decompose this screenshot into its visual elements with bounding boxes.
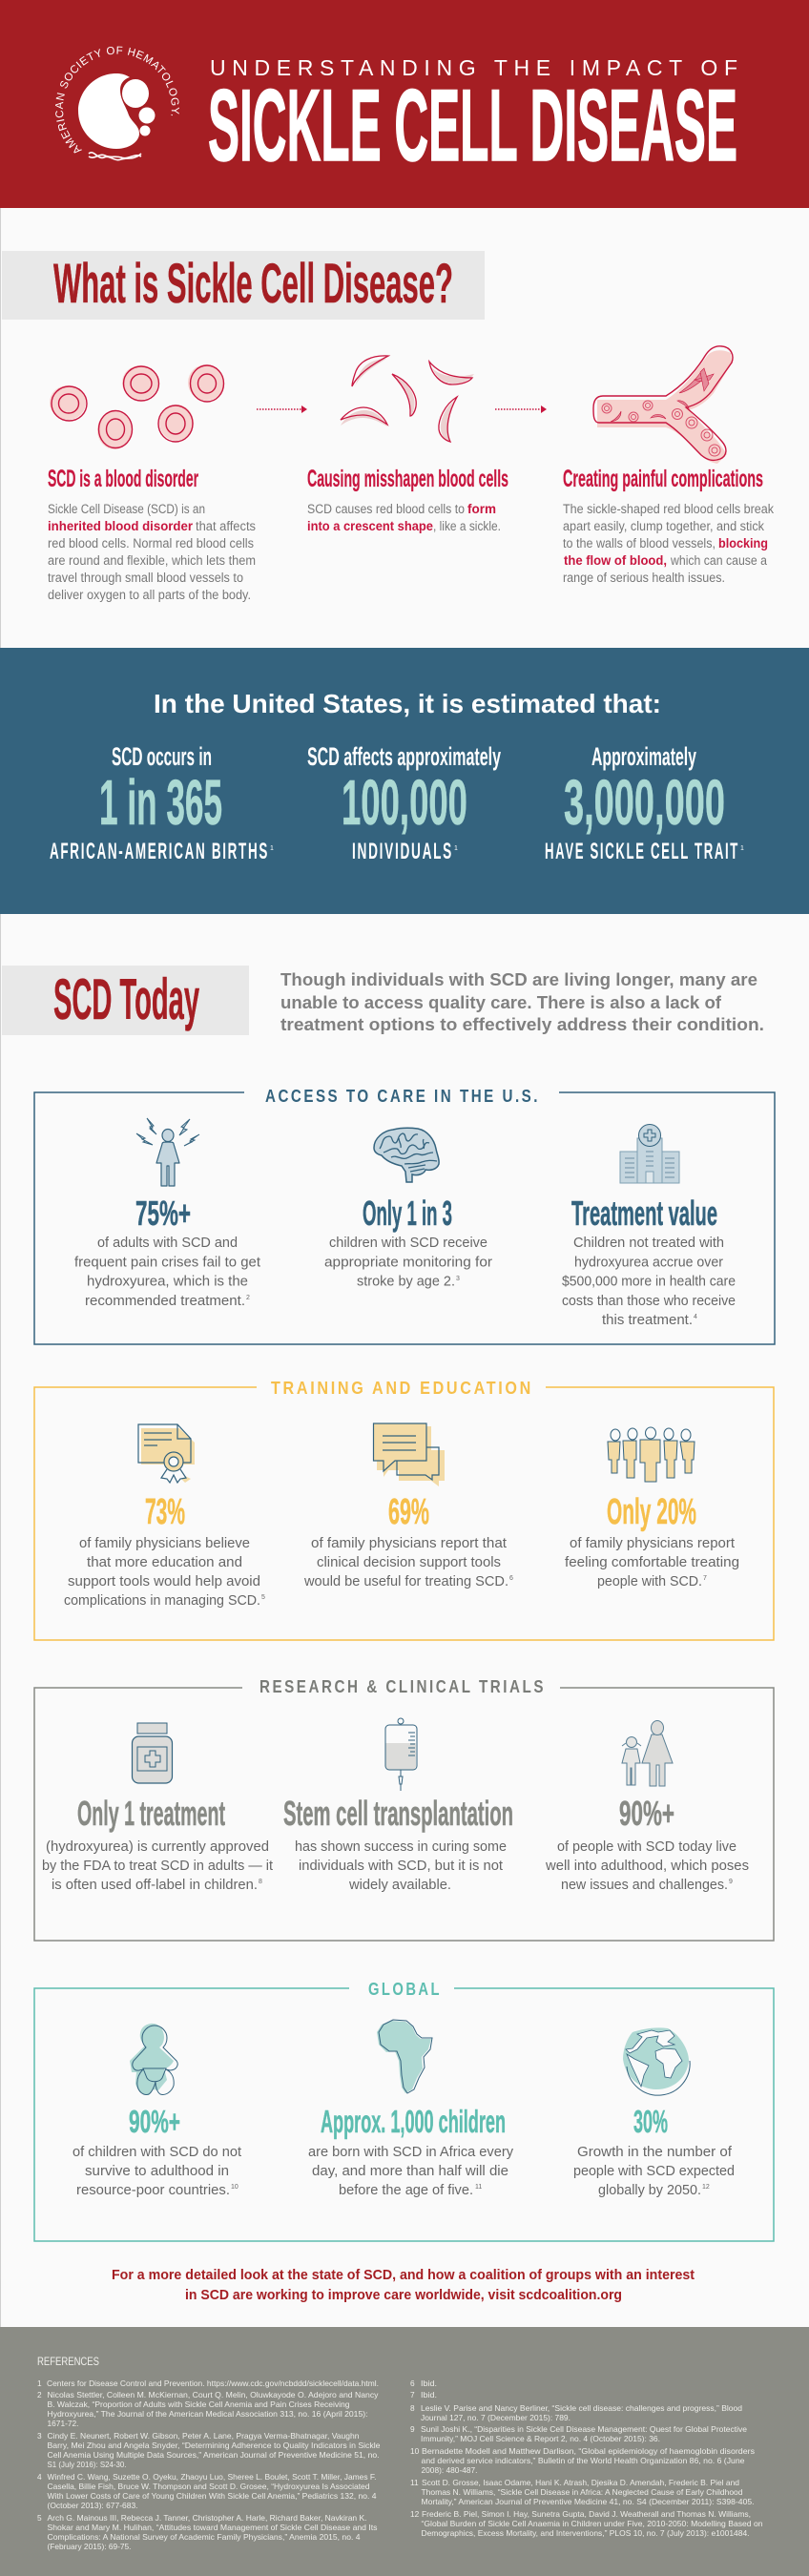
stat: 100,000: SCD affects approximately [307,742,501,771]
stat: only 1 in 3: children with SCD receive [329,1236,487,1251]
column: SCD is a blood disorder: travel through small blood vessels to [48,571,243,585]
column: creating painful complications: range of serious health issues. [563,571,725,585]
column: creating painful complications: to the walls of blood vessels, [563,536,716,551]
column: creating painful complications: blocking [718,536,768,551]
column: SCD is a blood disorder: deliver oxygen to all parts of the body. [48,588,251,602]
column: SCD is a blood disorder: are round and flexible, which lets them [48,553,256,568]
references list: right column: 12 [410,2509,420,2519]
references list: right column: Leslie V. Parise and Nancy Berliner, “Sickle cell disease: challenges and progress,” Blood [421,2403,742,2413]
header banner [0,0,809,208]
references list: right column [410,2379,763,2538]
stat: stem cell transplantation: widely available. [348,1878,451,1893]
arrow: cells to sickle cells [257,405,307,413]
icon: Africa map [377,2020,432,2093]
stat: 90%+ adulthood [545,1794,749,1893]
stat: approx 1,000 children: 11 [475,2184,482,2191]
stat: only 20%: people with SCD. [597,1574,702,1589]
stat: only 1 treatment: Only 1 treatment [77,1794,225,1833]
icon: round red blood cells [50,364,224,449]
column: SCD is a blood disorder: inherited blood disorder [48,519,194,533]
references list: left column [37,2379,381,2551]
icon: group of people [608,1427,695,1482]
stat: 3,000,000 [545,742,744,864]
stat: 69%: would be useful for treating SCD. [303,1574,508,1589]
references list: left column: Centers for Disease Control and Prevention. https://www.cdc.gov/ncbddd/sicklecell/data.html. [47,2379,379,2388]
stat: only 1 treatment: 8 [259,1879,262,1885]
references list: right column: 10 [410,2446,420,2456]
stat: stem cell transplantation: individuals with SCD, but it is not [299,1859,503,1874]
heading: what is SCD [2,251,485,320]
references list: right column: Ibid. [421,2379,437,2388]
stat: only 20% [565,1492,739,1589]
stat: treatment value: Children not treated with [573,1236,724,1251]
references list: left column: 5 [37,2513,42,2523]
icon: brain [374,1128,439,1182]
references list: right column: Sunil Joshi K., “Disparities in Sickle Cell Disease Management: Quest for Global Protective [421,2424,747,2434]
stat: only 1 treatment: is often used off-label in children. [52,1878,258,1893]
stat: 100,000: INDIVIDUALS [352,839,453,864]
stat: 69%: clinical decision support tools [317,1555,501,1570]
references list: left column: Barry, Mei Zhou and Angela Snyder, “Determining Adherence to Quality Indicators in Sickle [48,2441,381,2450]
stat: 30%: 12 [702,2184,710,2191]
references list: left column: 1671-72. [48,2419,78,2428]
stat: 1 in 365: 1 in 365 [99,767,222,839]
references panel [0,2327,809,2576]
panel title: global: GLOBAL [368,1980,442,1999]
panel: research and clinical trials [34,1677,774,1941]
stat: approx 1,000 children: before the age of five. [339,2183,473,2198]
stat: 75%+: 75%+ [135,1194,191,1233]
column: creating painful complications: which can cause a [670,553,767,568]
column: SCD is a blood disorder: red blood cells. Normal red blood cells [48,536,254,551]
stat: 30% [573,2104,735,2198]
stat: approx 1,000 children: are born with SCD in Africa every [308,2145,514,2160]
column: creating painful complications: apart easily, clump together, and stick [563,519,764,533]
arrow: sickle cells to blocked vessel [495,405,547,413]
stat: stem cell transplantation [283,1794,513,1893]
stat: 69%: of family physicians report that [311,1536,507,1551]
stat: approx 1,000 children [308,2104,514,2198]
stat: stem cell transplantation: has shown success in curing some [295,1839,507,1855]
icon: medicine bottle [132,1723,172,1783]
stat: 90%+ children: 10 [231,2184,239,2191]
stat: 75%+: of adults with SCD and [97,1236,238,1251]
references list: right column: Scott D. Grosse, Isaac Odame, Hani K. Atrash, Djesika D. Amendah, Frederic B. Piel and [422,2478,739,2487]
references list: left column: 3 [37,2431,42,2441]
stat: only 20%: feeling comfortable treating [565,1555,739,1570]
references list: left column: Cindy E. Neunert, Robert W. Gibson, Peter A. Lane, Pragya Verma-Bhatnagar, Vaughn [48,2431,360,2441]
references list: left column: Arch G. Mainous III, Rebecca J. Tanner, Christopher A. Harle, Richard Baker, Navkiran K. [48,2513,366,2523]
stat: 30%: 30% [633,2104,668,2139]
stat: 90%+ adulthood: well into adulthood, which poses [545,1859,749,1874]
references list: left column: Complications: A National Survey of Academic Family Physicians,” Anemia 2015, no. 4 [48,2532,361,2542]
stat: only 1 treatment [42,1794,273,1893]
column: SCD is a blood disorder [48,466,256,602]
references list: right column: 7 [410,2390,415,2399]
column: causing misshapen blood cells: form [467,502,496,516]
references list: right column: Ibid. [421,2390,437,2399]
stat: treatment value: costs than those who receive [562,1294,736,1309]
references list: right column: Immunity,” MOJ Cell Science & Report 2, no. 4 (October 2015): 36. [421,2434,660,2443]
stat: approx 1,000 children: Approx. 1,000 children [321,2104,506,2139]
column: creating painful complications [563,466,774,585]
column: SCD is a blood disorder: SCD is a blood disorder [48,466,198,492]
stat: 73%: support tools would help avoid [68,1574,260,1589]
icon: baby [130,2024,177,2095]
icon: globe [623,2027,690,2095]
stat: 3,000,000: 1 [740,845,744,852]
stat: 73% [64,1492,265,1609]
stat: treatment value: 4 [694,1314,697,1320]
panel title: research and clinical trials: RESEARCH & CLINICAL TRIALS [259,1677,546,1696]
stat: 100,000: 100,000 [342,767,467,839]
stat: 75%+ [74,1194,260,1309]
text: SCD Today intro: Though individuals with SCD are living longer, many are [280,969,757,989]
stat: 30%: globally by 2050. [598,2183,701,2198]
references list: left column: 1 [37,2379,42,2388]
stat: 75%+: 2 [246,1295,250,1301]
stat: 100,000 [307,742,501,864]
stat: only 1 treatment: (hydroxyurea) is currently approved [46,1839,269,1855]
stat: stem cell transplantation: Stem cell transplantation [283,1794,513,1833]
stat: 73%: of family physicians believe [79,1536,250,1551]
stat: only 20%: 7 [703,1575,707,1582]
stat: 75%+: recommended treatment. [85,1294,245,1309]
call to action: For a more detailed look at the state of SCD, and how a coalition of groups with an interest [112,2267,695,2283]
stat: 90%+ children [73,2104,241,2198]
heading: SCD Today [2,966,249,1035]
references list: left column: With Lower Costs of Care of Young Children With Sickle Cell Anemia,” Pediatrics 132, no. 4 [48,2491,377,2501]
stat: 69%: 69% [388,1492,429,1532]
heading: in the United States: In the United States, it is estimated that: [154,689,661,718]
column: causing misshapen blood cells: into a crescent shape [307,519,433,533]
panel: access to care [34,1087,775,1344]
references list: left column: Casella, Billie Fish, Bruce W. Thompson and Scott D. Grosee, “Hydroxyurea Is Associated [48,2482,370,2491]
stat: 90%+ children: resource-poor countries. [76,2183,230,2198]
heading: what is SCD: What is Sickle Cell Disease? [53,253,453,315]
stat: treatment value: $500,000 more in health care [562,1275,736,1290]
references list: left column: Cell Anemia Using Multiple Data Sources,” American Journal of Preventive Medicine 51, no. [48,2450,380,2460]
references list: right column: 11 [410,2478,419,2487]
stat: 75%+: hydroxyurea, which is the [87,1275,248,1290]
stat: approx 1,000 children: day, and more than half will die [312,2164,508,2179]
stat: only 1 in 3: stroke by age 2. [357,1275,455,1290]
references list: right column: Thomas N. Williams, “Sickle Cell Disease in Africa: A Neglected Cause of Early Childhood [422,2487,743,2497]
icon: speech bubbles [374,1423,445,1486]
stat: 90%+ adulthood: of people with SCD today live [557,1839,736,1855]
column: SCD is a blood disorder: Sickle Cell Disease (SCD) is an [48,502,205,516]
icon: person in pain [136,1118,199,1186]
logo: American Society of Hematology: AMERICAN SOCIETY OF HEMATOLOGY. [55,46,179,153]
references list: right column: 8 [410,2403,415,2413]
call to action: in SCD are working to improve care worldwide, visit scdcoalition.org [185,2287,622,2303]
stat: 30%: people with SCD expected [573,2164,735,2179]
icon: adult and child [622,1721,673,1786]
stat: 73%: that more education and [87,1555,242,1570]
references list: left column: B. Walczak, “Proportion of Adults with Sickle Cell Anemia and Pain Crises Receiving [48,2399,350,2409]
references list: right column: 2008): 480-487. [422,2465,477,2475]
references list: right column: 6 [410,2379,415,2388]
stat: 69% [303,1492,513,1589]
references list: left column: Shokar and Mary M. Hulihan, “Attitudes toward Management of Sickle Cell Disease and Its [48,2523,378,2532]
call to action [112,2267,695,2303]
references list: right column: Demographics, Excess Mortality, and Interventions,” PLOS 10, no. 7 (July 2013): e1001484. [422,2528,750,2538]
stat: 1 in 365: AFRICAN-AMERICAN BIRTHS [50,839,269,864]
references list: left column: (February 2015): 69-75. [48,2542,132,2551]
stat: only 1 treatment: by the FDA to treat SCD in adults — it [42,1859,273,1874]
stat: only 1 in 3: 3 [456,1276,460,1282]
header subtitle: UNDERSTANDING THE IMPACT OF [210,55,737,80]
stat: 100,000: 1 [454,845,458,852]
stat: 1 in 365 [50,742,274,864]
icon: sickle cells [341,356,474,442]
stat: treatment value: this treatment. [602,1313,693,1328]
icon: IV bag [385,1718,417,1791]
stat: 3,000,000: Approximately [591,742,696,771]
text: SCD Today intro [280,969,764,1034]
references list: left column: Nicolas Stettler, Colleen M. McKiernan, Court Q. Melin, Oluwkayode O. Adejoro and Nancy [48,2390,379,2399]
stat: 69%: 6 [509,1575,513,1582]
stat: 90%+ children: 90%+ [129,2104,180,2139]
stat: 90%+ adulthood: new issues and challenges. [561,1878,728,1893]
text: SCD Today intro: treatment options to effectively address their condition. [280,1014,764,1034]
panel: training and education [34,1379,774,1640]
icon: certificate [138,1424,195,1483]
stat: 73%: complications in managing SCD. [64,1593,260,1609]
stat: 73%: 73% [145,1492,185,1532]
references list: left column: S1 (July 2016): S24-30. [48,2460,126,2469]
stat: 75%+: frequent pain crises fail to get [74,1256,260,1271]
references list: left column: Winfred C. Wang, Suzette O. Oyeku, Zhaoyu Luo, Sheree L. Boulet, Scott T. Miller, James F. [48,2472,377,2482]
column: SCD is a blood disorder: that affects [196,519,256,533]
references list: left column: 4 [37,2472,42,2482]
stat: only 1 in 3: appropriate monitoring for [324,1256,492,1271]
section: what is SCD [2,251,774,602]
column: causing misshapen blood cells: Causing misshapen blood cells [307,466,508,492]
panel title: training and education: TRAINING AND EDUCATION [271,1379,533,1398]
references list: right column: Journal 127, no. 7 (December 2015): 789. [421,2413,570,2422]
references list: left column: (October 2013): 677-683. [48,2501,137,2510]
column: causing misshapen blood cells: SCD causes red blood cells to [307,502,465,516]
stat: 90%+ adulthood: 90%+ [619,1794,674,1833]
panel title: access to care: ACCESS TO CARE IN THE U.S. [265,1087,540,1106]
stat: 73%: 5 [261,1594,265,1601]
references list: right column: Bernadette Modell and Matthew Darlison, “Global epidemiology of haemoglobin disorders [422,2446,755,2456]
stat: only 1 in 3: Only 1 in 3 [363,1194,452,1233]
column: causing misshapen blood cells [307,466,508,533]
stat: 1 in 365: SCD occurs in [112,742,212,771]
references list: right column: Frederic B. Piel, Simon I. Hay, Sunetra Gupta, David J. Weatherall and Thomas N. Williams, [422,2509,751,2519]
references heading: REFERENCES [37,2357,99,2368]
panel: global [34,1980,774,2241]
stat: 1 in 365: 1 [270,845,274,852]
references list: left column: 2 [37,2390,42,2399]
stat: treatment value [562,1194,736,1328]
stat: 90%+ children: survive to adulthood in [85,2164,229,2179]
column: causing misshapen blood cells: , like a sickle. [433,519,501,533]
icon: blocked blood vessel [593,346,733,464]
column: creating painful complications: the flow of blood, [564,553,667,568]
references list: right column: Mortality,” American Journal of Preventive Medicine 41, no. S4 (December 2011): S398-405. [422,2497,754,2506]
icon: hospital [620,1124,679,1183]
stat: treatment value: hydroxyurea accrue over [574,1256,723,1271]
references list: left column: Hydroxyurea,” The Journal of the American Medical Association 313, no. 16 (April 2015): [48,2409,368,2419]
references list: right column: “Global Burden of Sickle Cell Anaemia in Children under Five, 2010-2050: Modelling Based on [422,2519,763,2528]
panel: US statistics [0,648,809,914]
stat: only 1 in 3 [324,1194,492,1290]
stat: 90%+ adulthood: 9 [729,1879,733,1885]
stat: only 20%: Only 20% [607,1492,696,1532]
stat: 90%+ children: of children with SCD do not [73,2145,241,2160]
stat: only 20%: of family physicians report [570,1536,735,1551]
references list: right column: and derived service indicators,” Bulletin of the World Health Organization 86, no. 6 (June [422,2456,745,2465]
column: creating painful complications: The sickle-shaped red blood cells break [563,502,774,516]
text: SCD Today intro: unable to access quality care. There is also a lack of [280,992,722,1012]
stat: 30%: Growth in the number of [577,2145,733,2160]
heading: SCD Today: SCD Today [53,967,199,1031]
references list: right column: 9 [410,2424,415,2434]
